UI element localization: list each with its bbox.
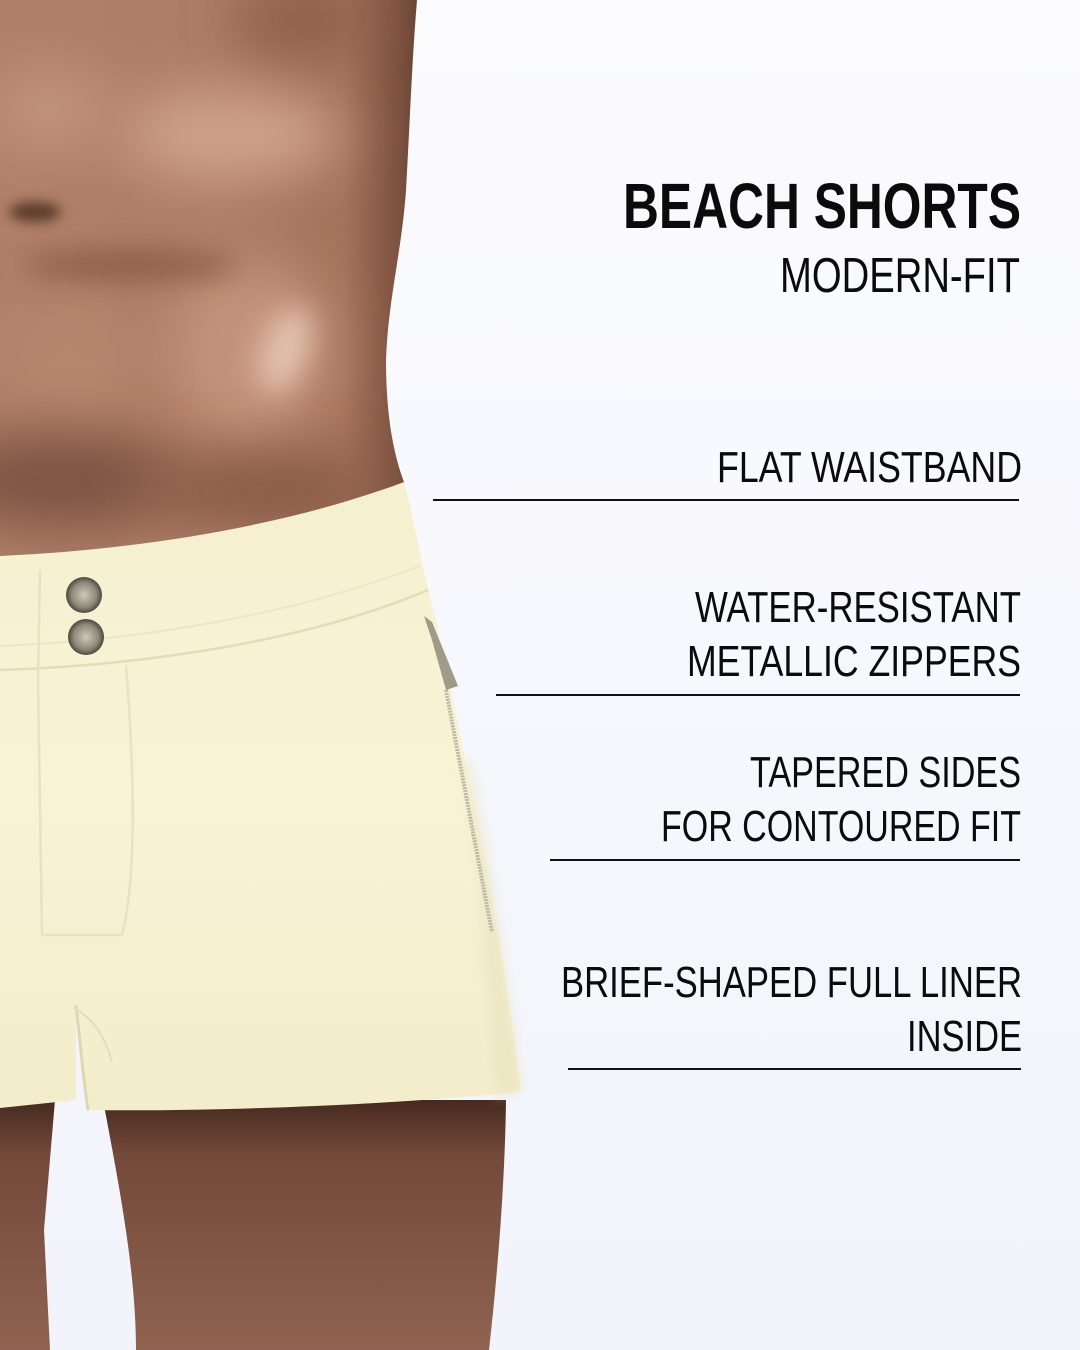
fly	[38, 570, 133, 935]
feature: liner: INSIDE	[907, 1012, 1022, 1061]
subtitle: MODERN-FIT	[780, 249, 1020, 303]
right leg	[103, 1100, 506, 1350]
shorts	[0, 482, 521, 1110]
inseam shadow	[76, 1005, 88, 1110]
navel	[9, 202, 61, 222]
left leg	[0, 1100, 55, 1350]
feature: liner	[561, 958, 1022, 1070]
torso	[0, 0, 430, 570]
photo: model wearing shorts	[0, 0, 521, 1350]
button: upper	[66, 577, 102, 613]
feature: tapered sides	[550, 748, 1021, 861]
side shading	[464, 760, 521, 1096]
zipper	[424, 616, 492, 932]
feature: zippers	[496, 583, 1021, 696]
waistband seam	[0, 590, 428, 670]
button: lower	[68, 619, 104, 655]
hem curve	[74, 1008, 112, 1062]
